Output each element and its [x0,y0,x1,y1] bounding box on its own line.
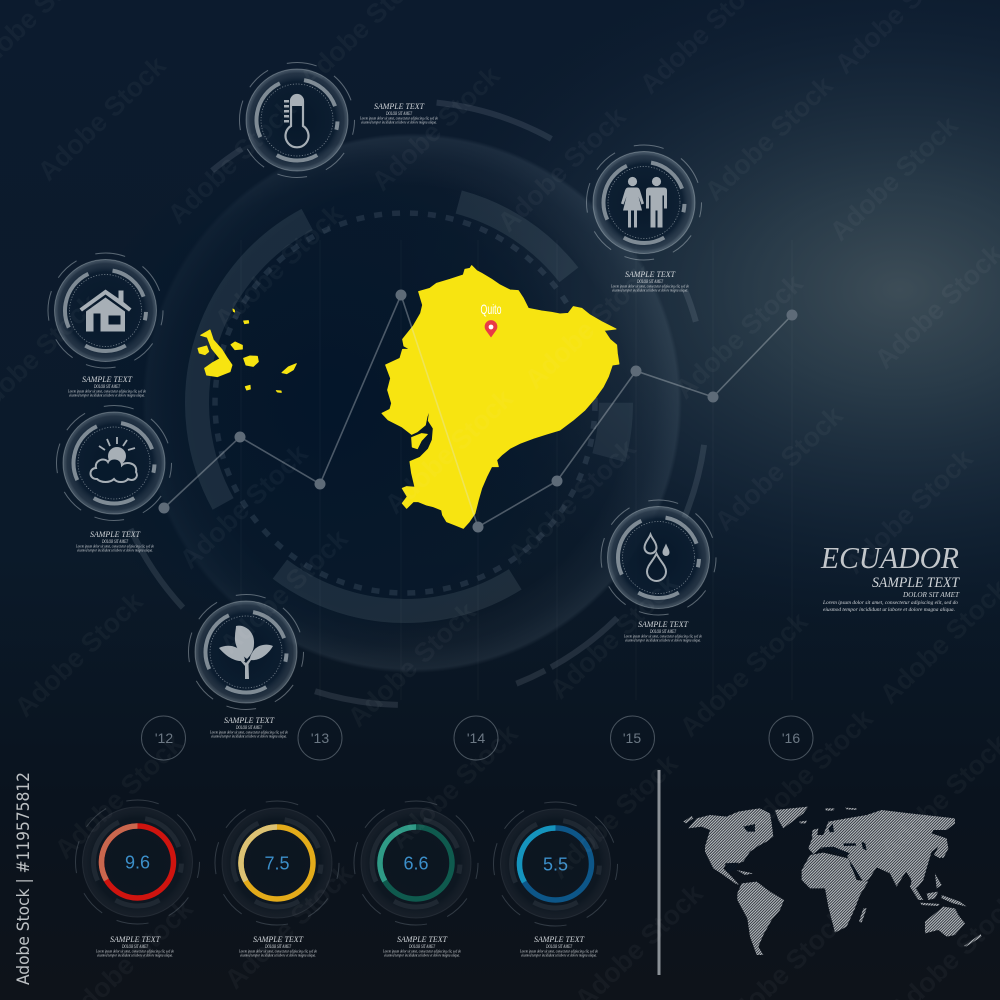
watermark pattern: Adobe Stock [544,748,684,885]
hub: weather [47,396,181,530]
watermark pattern: Adobe Stock [824,110,964,247]
gauge captions: DOLOR SIT AMET [408,945,436,950]
text block: house: SAMPLE TEXT [82,374,133,384]
text block: people: Lorem ipsum dolor sit amet, consectetur adipiscing elit, sed do [610,284,689,290]
watermark pattern: Adobe Stock [674,606,814,743]
gauge captions: DOLOR SIT AMET [264,945,292,950]
watermark pattern: Adobe Stock [366,60,506,197]
text block: weather [75,529,154,552]
gauge captions: Lorem ipsum dolor sit amet, consectetur adipiscing elit, sed do [519,950,598,954]
watermark pattern: Adobe Stock [492,101,632,238]
text block: house [67,374,146,398]
gauge captions: SAMPLE TEXT [534,934,585,944]
icon: water drops [644,534,670,581]
gauge captions: Lorem ipsum dolor sit amet, consectetur adipiscing elit, sed do [95,950,174,954]
watermark pattern: Adobe Stock [162,93,302,230]
gauge: 7.5 [205,791,349,935]
title block: Ecuador: DOLOR SIT AMET [902,590,960,599]
text block: thermometer: eiusmod tempor incididunt ut labore et dolore magna aliqua. [361,120,437,124]
text block: people [610,269,689,292]
gauge captions: SAMPLE TEXT [397,934,448,944]
text block: plant: eiusmod tempor incididunt ut labore et dolore magna aliqua. [211,734,287,738]
text block: plant: DOLOR SIT AMET [235,726,263,731]
icon: woman and man [621,177,667,228]
text block: plant [209,715,288,738]
text block: water: Lorem ipsum dolor sit amet, consectetur adipiscing elit, sed do [623,634,702,640]
gauge: 6.6 [344,791,488,935]
text block: thermometer [359,101,438,124]
gauge captions: eiusmod tempor incididunt ut labore et dolore magna aliqua. [384,954,460,958]
year labels: '16 [782,730,800,746]
text block: weather: eiusmod tempor incididunt ut labore et dolore magna aliqua. [77,548,153,552]
hub: people [577,136,711,269]
icon: map pin [485,320,497,338]
watermark pattern: Adobe Stock [219,858,359,995]
year labels: '15 [623,730,641,746]
gauge captions: eiusmod tempor incididunt ut labore et dolore magna aliqua. [97,954,173,958]
watermark pattern: Adobe Stock [32,50,172,187]
gauge captions: eiusmod tempor incididunt ut labore et dolore magna aliqua. [521,954,597,958]
gauge: 5.5: 5.5 [543,854,568,874]
gauge: 6.6: 6.6 [403,854,429,874]
watermark pattern: Adobe Stock [502,433,642,570]
watermark pattern: Adobe Stock [709,400,849,537]
watermark pattern: Adobe Stock [699,70,839,207]
text block: plant: SAMPLE TEXT [224,715,275,725]
text block: thermometer: DOLOR SIT AMET [385,112,413,117]
year labels: '14 [467,730,485,746]
gauge captions [95,934,598,958]
gauge captions: SAMPLE TEXT [110,934,161,944]
text block: people: eiusmod tempor incididunt ut labore et dolore magna aliqua. [612,288,688,292]
icon: house [80,290,132,332]
year labels: '12 [155,730,173,746]
gauge: 7.5: 7.5 [264,854,290,874]
year labels: '13 [311,730,329,746]
gauge: 9.6: 9.6 [125,852,150,872]
icon: plant [219,626,273,679]
faint vertical guide lines [241,240,792,700]
gauge: 5.5 [484,792,627,936]
text block: people: SAMPLE TEXT [625,269,676,279]
text block: house: DOLOR SIT AMET [93,385,121,390]
title block: Ecuador: eiusmod tempor incididunt ut labore et dolore magna aliqua. [823,607,955,613]
year markers [142,716,813,760]
divider [658,770,660,975]
watermark pattern: Adobe Stock [174,438,314,575]
text block: people: DOLOR SIT AMET [636,280,664,285]
text block: house: eiusmod tempor incididunt ut labore et dolore magna aliqua. [69,394,145,398]
Quito label: Quito [480,301,502,317]
hub: thermometer [230,53,364,187]
gauge: 9.6 [66,790,209,934]
watermark pattern: Adobe Stock [209,198,349,335]
watermark pattern: Adobe Stock [544,568,684,705]
watermark pattern: Adobe Stock [214,523,354,660]
watermark pattern: Adobe Stock [739,703,879,840]
text block: water [623,619,702,642]
gauge captions: eiusmod tempor incididunt ut labore et dolore magna aliqua. [240,954,316,958]
title block: Ecuador: Lorem ipsum dolor sit amet, consectetur adipiscing elit, sed do [822,600,958,606]
world map [683,807,982,955]
watermark pattern: Adobe Stock [669,268,809,405]
world map inland water [725,823,867,877]
gauge captions: Lorem ipsum dolor sit amet, consectetur adipiscing elit, sed do [382,950,461,954]
text block: water: SAMPLE TEXT [638,619,689,629]
central HUD rings [70,71,737,735]
text block: thermometer: SAMPLE TEXT [374,101,425,111]
hub: water [592,491,725,624]
watermark pattern: Adobe Stock [384,718,524,855]
gauge captions: DOLOR SIT AMET [121,945,149,950]
text block: plant: Lorem ipsum dolor sit amet, consectetur adipiscing elit, sed do [209,730,288,736]
text block: water: eiusmod tempor incididunt ut labore et dolore magna aliqua. [625,638,701,642]
text block: weather: DOLOR SIT AMET [101,540,129,545]
hub: plant [179,585,313,719]
watermark pattern: Adobe Stock [9,586,149,723]
text block: thermometer: Lorem ipsum dolor sit amet, consectetur adipiscing elit, sed do [359,116,438,122]
title block: Ecuador: SAMPLE TEXT [872,575,960,591]
watermark pattern: Adobe Stock [379,383,519,520]
text block: house: Lorem ipsum dolor sit amet, consectetur adipiscing elit, sed do [67,390,146,394]
icon: thermometer [284,95,308,147]
text block: water: DOLOR SIT AMET [649,630,677,635]
watermark pattern: Adobe Stock [342,596,482,733]
map: Ecuador mainland [382,266,619,528]
year labels [155,730,800,746]
hub: house [39,244,172,377]
watermark pattern: Adobe Stock [49,728,189,865]
icon: cloud and sun [90,437,137,482]
watermark pattern: Adobe Stock [839,443,979,580]
title block: Ecuador: ECUADOR [820,540,959,575]
gauge captions: SAMPLE TEXT [253,934,304,944]
title block: Ecuador [820,540,960,613]
credit: vertical stock id: Adobe Stock | #119575812 [14,772,34,985]
map: Galapagos islands [198,309,296,392]
gauge captions: DOLOR SIT AMET [545,945,573,950]
watermark pattern: Adobe Stock [519,258,659,395]
line chart [158,290,798,532]
gauge captions: Lorem ipsum dolor sit amet, consectetur adipiscing elit, sed do [238,950,317,954]
text block: weather: SAMPLE TEXT [90,529,141,539]
text block: weather: Lorem ipsum dolor sit amet, consectetur adipiscing elit, sed do [75,544,154,550]
